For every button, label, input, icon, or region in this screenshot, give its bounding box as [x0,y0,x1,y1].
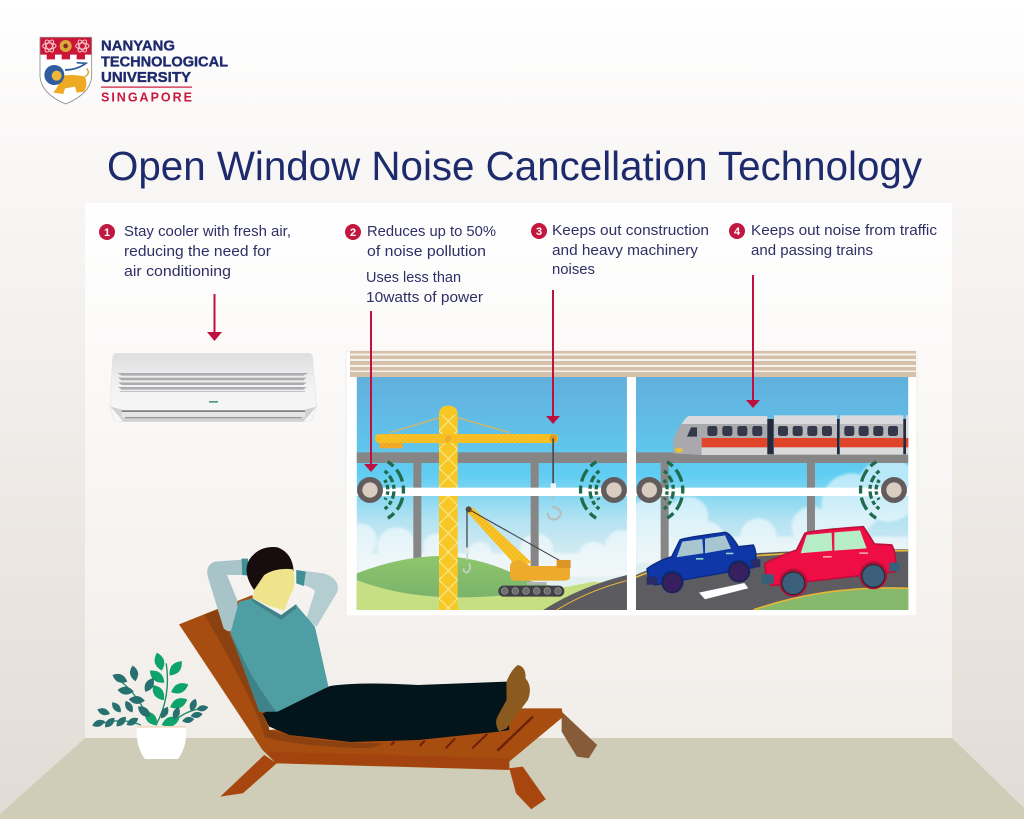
man relaxing on lounge chair [179,547,597,809]
benefit 4 text [729,223,937,259]
window with outdoor scene [343,351,920,616]
benefit 3 text: 3 [536,226,542,238]
cuffs [242,559,306,586]
red car [762,527,900,597]
university name [101,38,228,86]
benefit 1 text [99,224,291,280]
benefit 2 text: of noise pollution [367,244,486,260]
arrow: to air conditioner [207,294,222,341]
arrow: to train [746,275,760,408]
road [636,549,908,610]
benefit 4 text: 4 [734,226,741,238]
benefit 3 text: and heavy machinery [552,243,699,259]
benefit 1 text: air conditioning [124,264,231,280]
benefit 1 text: reducing the need for [124,244,271,260]
benefit 1 text: 1 [104,227,110,239]
benefit 1 text: Stay cooler with fresh air, [124,224,291,240]
right arm [296,570,338,627]
benefit 2 text: 2 [350,227,356,239]
benefit 3 text [531,223,709,278]
left window pane: construction scene [343,377,638,610]
benefit 2 text: 10watts of power [366,290,483,306]
shoes [496,665,530,732]
benefit 3 text: noises [552,262,595,278]
window frame [346,351,917,616]
benefit 4 text: and passing trains [751,243,873,259]
logo: Nanyang Technological University [40,37,228,104]
benefit 3 text: Keeps out construction [552,223,709,239]
Singapore wordmark: SINGAPORE [101,90,192,104]
lounge chair [179,595,597,809]
train [673,415,909,455]
trousers [263,682,509,742]
benefit 2 text: Uses less than [366,270,461,286]
arrow: to window motor [364,311,378,472]
potted plant [91,651,209,759]
arrow: to crane [546,290,560,424]
head [247,547,294,611]
benefit 4 text: Keeps out noise from traffic [751,223,937,239]
right window pane: train and traffic scene [625,377,920,610]
air conditioner [110,353,317,422]
blue car [647,532,760,593]
benefit 2 text: Reduces up to 50% [367,224,496,240]
benefit 2 text [345,224,496,306]
shield crest [40,37,92,104]
university name: TECHNOLOGICAL [101,54,228,70]
university name: NANYANG [101,38,175,54]
sweater vest [230,598,328,712]
window blind [350,351,916,377]
title: Open Window Noise Cancellation Technology [107,143,922,189]
left arm [207,559,247,631]
university name: UNIVERSITY [101,70,191,86]
